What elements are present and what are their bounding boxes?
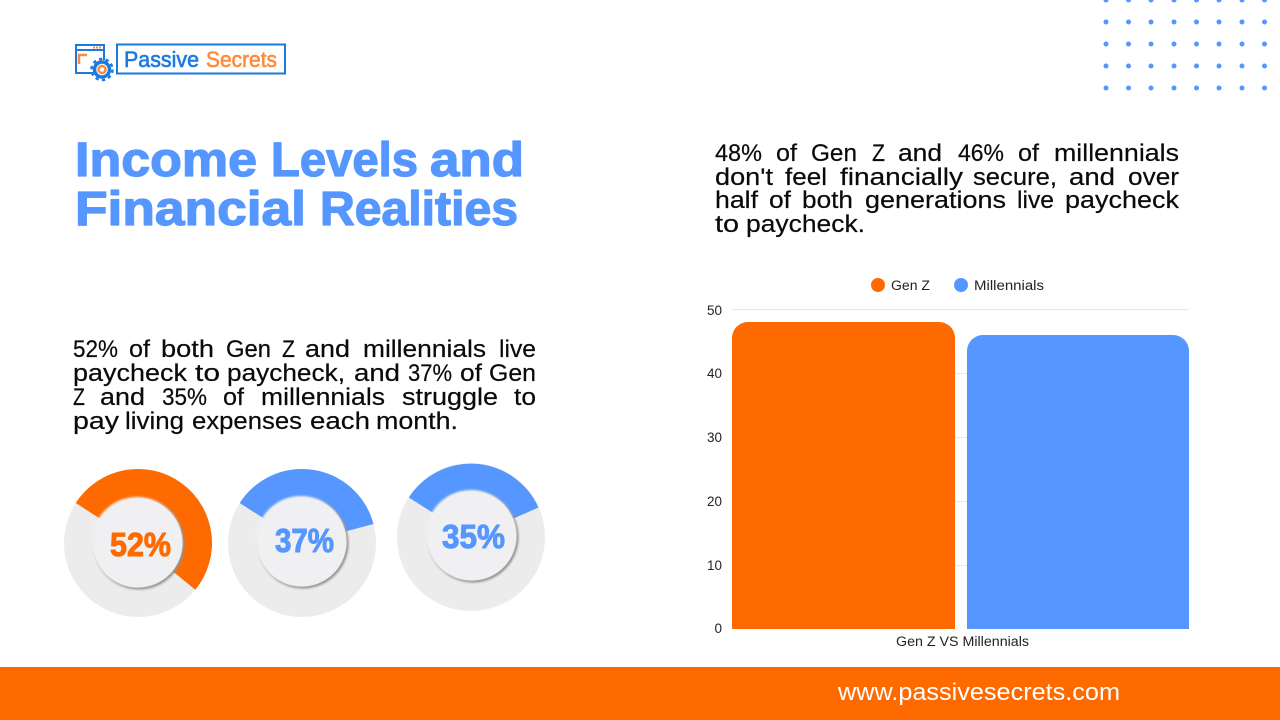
text block: left statistic: struggle <box>402 384 498 411</box>
chart axis labels: 40 <box>707 366 722 381</box>
text block: left statistic: month. <box>376 408 458 435</box>
text block: right statistic: live <box>1017 187 1054 214</box>
text block: right statistic: paycheck. <box>746 211 865 238</box>
donut chart: 52% <box>64 469 212 617</box>
bar: Millennials <box>967 335 1189 629</box>
donut chart: 37%: 37% <box>275 522 334 559</box>
text block: right statistic: paycheck <box>1065 187 1180 214</box>
footer bar: www.passivesecrets.com <box>837 679 1120 706</box>
text block: left statistic: living <box>125 408 184 435</box>
chart axis labels: 0 <box>714 621 722 636</box>
logo wordmark box <box>117 44 285 74</box>
text block: right statistic: of <box>1018 140 1039 167</box>
title: Levels <box>271 134 418 187</box>
footer bar <box>0 667 1280 720</box>
donut chart: 35% <box>397 463 545 611</box>
logo wordmark box: Secrets <box>206 47 277 72</box>
text block: left statistic: of <box>129 336 150 363</box>
text block: left statistic: 35% <box>162 384 207 411</box>
text block: right statistic: feel <box>785 164 827 191</box>
text block: right statistic: secure, <box>973 164 1057 191</box>
text block: left statistic: millennials <box>261 384 385 411</box>
chart legend: Gen Z <box>891 278 930 293</box>
chart legend <box>871 278 1044 293</box>
text block: right statistic: over <box>1128 164 1179 191</box>
title: Realities <box>320 183 518 236</box>
text block: left statistic: Gen <box>489 360 536 387</box>
text block: left statistic: pay <box>73 408 119 435</box>
text block: right statistic: of <box>776 140 797 167</box>
donut chart: 35%: 35% <box>442 518 505 555</box>
text block: left statistic: Gen <box>226 336 271 363</box>
text block: right statistic: Gen <box>811 140 857 167</box>
donut chart: 37% <box>228 469 376 617</box>
donut chart: 52%: 52% <box>110 526 171 563</box>
text block: right statistic: Z <box>872 140 885 167</box>
text block: right statistic: and <box>1069 164 1115 191</box>
text block: left statistic: millennials <box>363 336 486 363</box>
bar: Gen Z <box>732 322 955 629</box>
logo wordmark box: Passive <box>124 47 199 72</box>
chart axis labels: 10 <box>707 558 722 573</box>
text block: left statistic: 52% <box>73 336 118 363</box>
text block: right statistic: millennials <box>1054 140 1179 167</box>
text block: left statistic: live <box>499 336 536 363</box>
text block: left statistic: to <box>514 384 536 411</box>
text block: left statistic: and <box>100 384 145 411</box>
text block: left statistic: each <box>310 408 370 435</box>
text block: left statistic: to <box>195 360 220 387</box>
chart axis labels <box>707 303 722 636</box>
chart axis labels: 50 <box>707 303 722 318</box>
text block: left statistic: both <box>161 336 214 363</box>
text block: right statistic: generations <box>865 187 1006 214</box>
text block: left statistic: and <box>305 336 350 363</box>
title <box>75 134 524 236</box>
chart legend: Millennials <box>974 278 1044 293</box>
chart axis labels: 20 <box>707 494 722 509</box>
text block: left statistic: paycheck <box>73 360 188 387</box>
title: Financial <box>75 183 306 236</box>
icon: browser window with gear <box>76 45 112 80</box>
chart x-axis label: Gen Z VS Millennials <box>896 634 1029 649</box>
text block: left statistic <box>73 336 536 435</box>
text block: left statistic: of <box>460 360 482 387</box>
text block: left statistic: and <box>354 360 400 387</box>
text block: right statistic: don't <box>715 164 773 191</box>
text block: right statistic: financially <box>840 164 963 191</box>
text block: left statistic: of <box>223 384 244 411</box>
text block: left statistic: 37% <box>408 360 452 387</box>
text block: left statistic: paycheck, <box>227 360 345 387</box>
bar chart <box>707 278 1189 649</box>
text block: right statistic: of <box>769 187 791 214</box>
text block: right statistic: to <box>715 211 739 238</box>
title: Income <box>75 134 257 187</box>
text block: left statistic: Z <box>282 336 295 363</box>
text block: right statistic: both <box>802 187 853 214</box>
chart axis labels: 30 <box>707 430 722 445</box>
text block: right statistic: 48% <box>715 140 762 167</box>
text block: right statistic: 46% <box>958 140 1004 167</box>
decorative dot grid <box>1104 0 1267 90</box>
text block: right statistic: and <box>898 140 942 167</box>
logo <box>76 44 285 80</box>
text block: left statistic: expenses <box>192 408 302 435</box>
text block: right statistic: half <box>715 187 758 214</box>
text block: left statistic: Z <box>73 384 85 411</box>
title: and <box>430 134 524 187</box>
text block: right statistic <box>715 140 1180 238</box>
